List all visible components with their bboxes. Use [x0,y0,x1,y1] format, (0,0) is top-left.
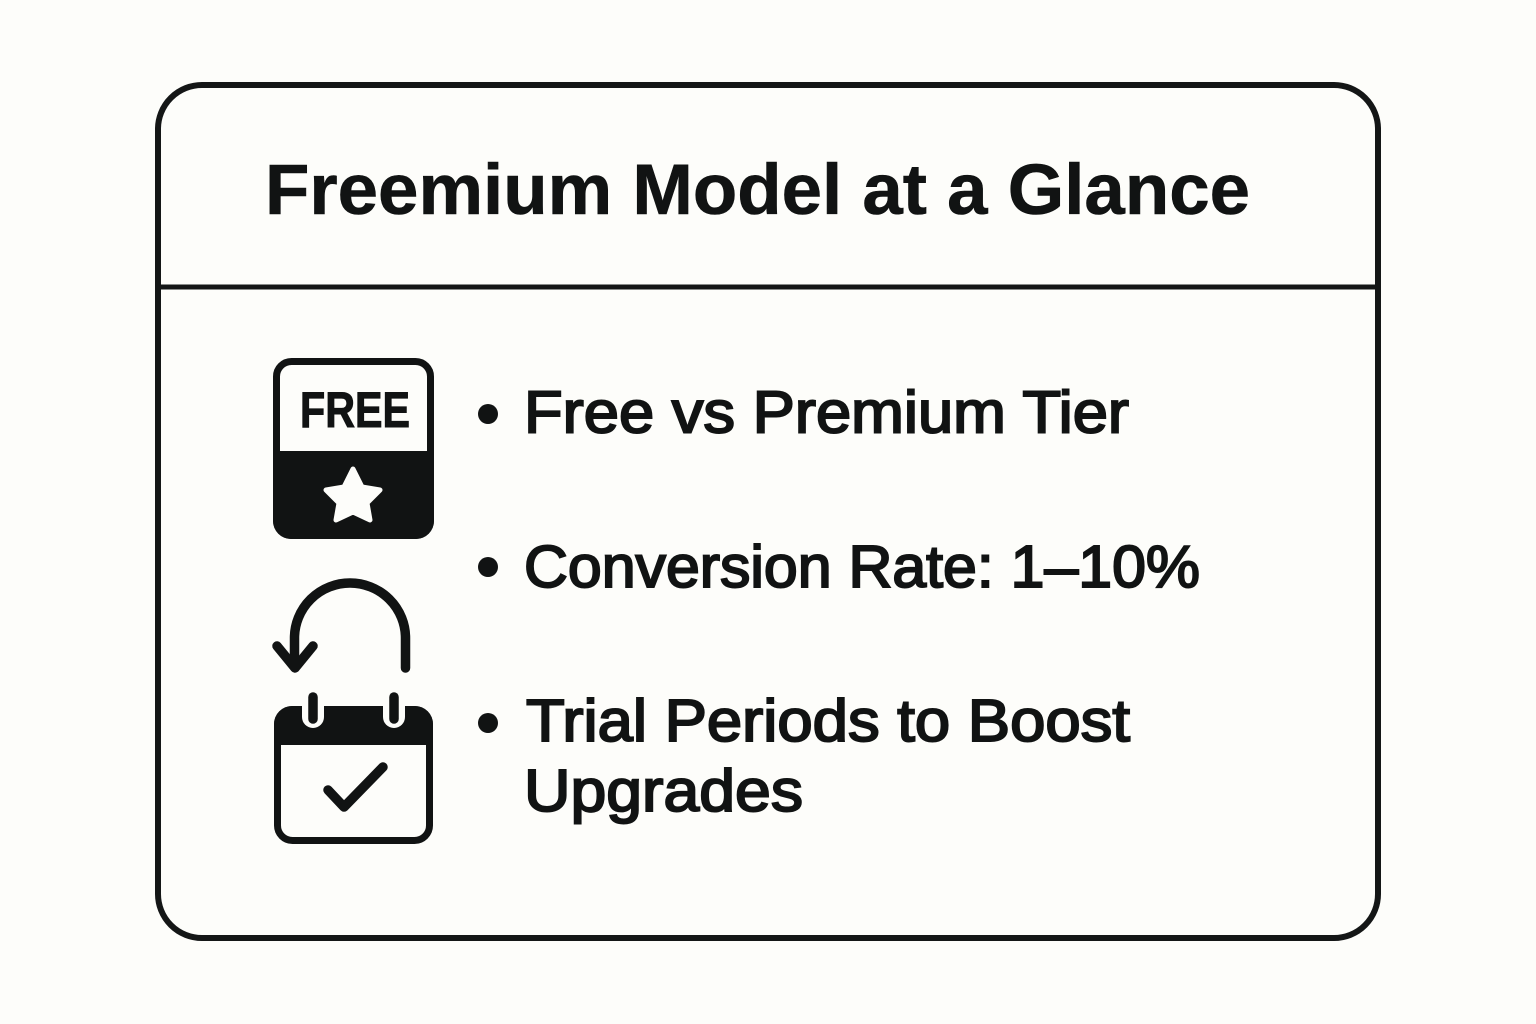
bullet: free vs premium tier: Free vs Premium Tier [524,380,1129,446]
panel: card frame [158,85,1378,938]
title: Freemium Model at a Glance [265,151,1250,230]
bullet: trial periods: Upgrades [524,758,803,824]
bullet: trial periods: Trial Periods to Boost [526,688,1130,754]
icon: calendar with check [274,697,433,840]
bullet: conversion rate: Conversion Rate: 1–10% [524,534,1200,600]
icon: free badge with star: FREE [300,382,410,438]
icon: free badge with star [273,362,434,539]
icon: return arrow [277,583,406,668]
bullet: trial periods [478,688,1130,824]
